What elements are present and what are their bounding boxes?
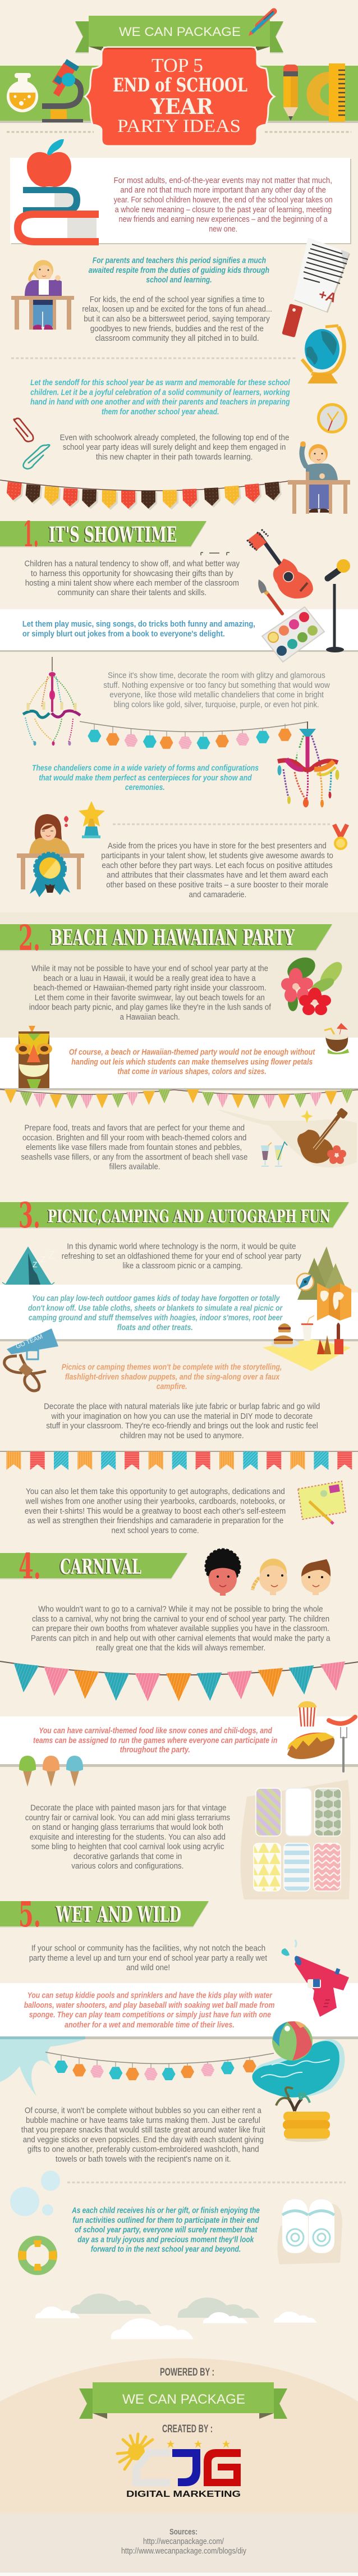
text: following ideas: this new chapter in their path towards learning. [96, 453, 253, 462]
text: campfire callout: Picnics or camping themes won't be complete with the storytelling, [62, 1362, 282, 1372]
water games text [24, 1991, 274, 2030]
created by label: CREATED BY : [162, 2423, 213, 2435]
sendoff text: Let the sendoff for this school year be as warm and memorable for these school [30, 378, 290, 387]
sources text: http://www.wecanpackage.com/blogs/diy [121, 2546, 246, 2556]
bunting: dotted pennants [0, 480, 288, 509]
section 1 heading: 1. [23, 514, 39, 555]
dotted rule [113, 823, 330, 825]
icon: megaphone [7, 1328, 58, 1359]
section 4 text: Who wouldn't want to go to a carnival? While it may not be possible to bring the whole [38, 1605, 323, 1614]
text: autographs: next school years to come. [111, 1526, 199, 1535]
section 5 heading [0, 1894, 209, 1935]
title lines: END of SCHOOL [113, 74, 247, 97]
text: mason jars [25, 1803, 230, 1871]
icon: cocktail glasses [261, 1142, 287, 1166]
text: food and favors: elements like vase fillers made from fountain stones and pebbles, [26, 1143, 242, 1152]
icon: chili dog [287, 1733, 334, 1759]
section 1 heading [0, 514, 206, 555]
games text: You can play low-tech outdoor games kids of today have forgotten or totally [32, 1294, 280, 1303]
section 2 text: While it may not be possible to have your end of school year party at the [31, 963, 268, 974]
text: mason jars: exquisite and interesting for the students. You can also add [30, 1833, 226, 1842]
icon: pink chandelier [23, 657, 80, 746]
sources text [121, 2527, 246, 2556]
leis text: that come in various shapes, colors and sizes. [118, 1067, 267, 1076]
number: 5. [19, 1894, 41, 1935]
water games text: sponge. They can play team competitions or simply just have fun with one [29, 2010, 271, 2020]
icon: microphone [326, 559, 350, 652]
talents text [22, 619, 255, 639]
section 5 text: and wild one! [126, 1963, 170, 1972]
kids text: classroom community they all pitched in to build. [95, 334, 259, 343]
text: food and favors: seashells vase fillers, or any from the assortment of beach shell vase [21, 1152, 247, 1162]
text: chandelier callout: ceremonies. [125, 783, 165, 792]
white band: outdoor games [0, 1285, 358, 1341]
kids text: For kids, the end of the school year signifies a time to [90, 295, 264, 304]
icon: picnic spread [263, 1316, 351, 1371]
food text: throughout the party. [120, 1745, 190, 1755]
sources panel [0, 2514, 358, 2576]
icon: envelope and pencil [298, 1481, 346, 1524]
footer hill [0, 2358, 358, 2514]
icon: girl at desk [11, 260, 74, 330]
food text: You can have carnival-themed food like snow cones and chili-dogs, and [39, 1726, 273, 1735]
games text [28, 1294, 283, 1332]
icon: teal paperclip [23, 445, 49, 469]
section 3 text: refreshing to set an oldfashioned theme for your end of school year party [62, 1252, 301, 1261]
icon: tent [2, 1246, 55, 1285]
number: 2. [19, 917, 40, 958]
section 4 text: Parents can pitch in and help out with other carnival elements that would make the party a [31, 1634, 331, 1643]
brown-haired kid [301, 1559, 331, 1595]
water games text: another for a wet and memorable time of their lives. [65, 2020, 235, 2030]
footer ribbon [79, 2382, 287, 2419]
talents text: Let them play music, sing songs, do tricks both funny and amazing, [22, 619, 255, 629]
text: natural materials: children may not be used to anymore. [120, 1431, 244, 1441]
panel: intro card [10, 158, 351, 244]
sendoff text: them for another school year ahead. [102, 407, 219, 417]
brand name: WE CAN PACKAGE [119, 25, 241, 39]
section 3 heading [0, 1195, 349, 1236]
text: natural materials: stuff in your classroom. They're eco-friendly and brings out the look and rustic feel [46, 1421, 318, 1431]
section 4 text: can prepare their own booths from whatever available supplies you have in the classroom. [32, 1624, 329, 1633]
icon: pen [249, 11, 274, 36]
text: glitzy room: bling colors like gold, silver, turquoise, purple, or even hot pink. [114, 700, 319, 710]
parents and teachers text: For parents and teachers this period signifies a much [93, 256, 266, 265]
text: bubbles: towels or bath towels with the recipient's name on it. [56, 2154, 231, 2164]
games text: don't know off. Use table cloths, sheets or blankets to simulate a real picnic or [28, 1304, 283, 1313]
section 2 text: a Hawaiian beach. [120, 1012, 180, 1022]
icon: popcorn [297, 1701, 317, 1727]
text: campfire callout [62, 1362, 282, 1391]
text: awards: Aside from the prices you have in store for the best presenters and [108, 841, 327, 851]
text: awards: each other before they part ways. Let each focus on positive attitudes [102, 861, 333, 870]
icon: pencil [283, 65, 298, 121]
text: natural materials: with your imagination on how you can use the material in DIY mode to decorate [51, 1412, 313, 1421]
water games text: You can setup kiddie pools and sprinklers and have the kids play with water [27, 1991, 273, 2000]
text: mason jars: various colors and configurations. [71, 1861, 183, 1871]
text: awards: and attributes that their classmates have and let them award each [107, 870, 328, 880]
section 5 text: party theme a level up and turn your end of school year party a really wet [29, 1953, 268, 1963]
icon: paintbrush [258, 579, 282, 614]
text: autographs: even their t-shirts! This would be a greatway to boost each other's self-esteem [25, 1506, 286, 1516]
icon: palm on inflatable rings [276, 2088, 330, 2142]
icon: guitar [247, 529, 313, 599]
dotted rule [67, 2182, 346, 2183]
section 1 text: community can share their talents and skills. [57, 588, 206, 597]
section 3 text: In this dynamic world where technology is the norm, it would be quite [67, 1242, 296, 1251]
icon: tiki mask [15, 1026, 52, 1090]
text: food and favors: fillers available. [109, 1162, 160, 1171]
blonde kid [253, 1559, 287, 1595]
section 1 text: to harness this opportunity for showcasing their gifts than by [31, 569, 233, 578]
sources text: http://wecanpackage.com/ [143, 2537, 224, 2546]
intro paragraph: new one. [209, 225, 237, 234]
text: autographs: You can also let them take this opportunity to get autographs, dedications and [26, 1487, 285, 1496]
text: closing: of school year party, everyone will surely remember that [75, 2225, 258, 2235]
white band: water games [0, 1983, 358, 2039]
text: glitzy room [103, 670, 330, 710]
dotted rule [11, 357, 297, 359]
text: bubbles: Of course, it won't be complete without bubbles so you can either rent a [25, 2105, 261, 2116]
parents and teachers text [89, 256, 269, 285]
section 4 text: really great one that the kids will always remember. [96, 1643, 265, 1653]
icon: folded map [317, 1283, 351, 1321]
icon: rolled towels [277, 2199, 342, 2264]
icon: microscope [42, 63, 83, 122]
text: campfire callout: flashlight-driven shadow puppets, and the sing-along over a faux [65, 1372, 280, 1382]
text: closing: forward to in the next school year and beyond. [91, 2245, 241, 2254]
title card [85, 47, 274, 146]
section 1 text: Children has a natural tendency to show off, and what better way [25, 559, 240, 568]
white band: carnival food [0, 1716, 358, 1767]
bunting: large pennants [0, 1661, 358, 1701]
icon: girl with rosette [17, 814, 84, 897]
text: bubbles: bubble machine or have teams take turns making them. Just be careful [26, 2116, 260, 2125]
icon: ice creams [19, 1756, 83, 1787]
sendoff text [30, 378, 290, 417]
icon: flask [7, 73, 38, 112]
icon: red paperclip [14, 418, 33, 441]
text: autographs: well wishes from one another using their yearbooks, cardboards, notebooks, or [25, 1497, 285, 1506]
intro paragraph: For most adults, end-of-the-year events may not matter that much, [114, 176, 332, 185]
footer brand name: WE CAN PACKAGE [122, 2392, 245, 2407]
icon: tent: Z [48, 1249, 55, 1262]
text: following ideas: school year party ideas will surely delight and keep them engaged in [63, 442, 286, 452]
icon: coconut drink [324, 1023, 349, 1054]
text: mason jars: on stand or hanging glass terrariums that would look both [32, 1823, 223, 1832]
icon: tent: Z [33, 1260, 38, 1269]
text: awards: and camaraderie. [189, 890, 246, 899]
intro paragraph [114, 176, 333, 234]
text: glitzy room: everyone, like those wild metallic chandeliers that come in bright [109, 690, 324, 700]
icon: eraser [282, 304, 303, 337]
heading text: CARNIVAL [60, 1555, 141, 1579]
text: chandelier callout: that would make them perfect as centerpieces for your show and [39, 773, 252, 783]
icon: star trophy [79, 801, 105, 838]
icon: life ring [19, 2240, 57, 2271]
afro kid [205, 1549, 240, 1596]
icon: graded paper [293, 237, 350, 313]
text: closing: day as a truly joyous and precious moment they'll look [77, 2235, 254, 2245]
text: food and favors [21, 1123, 247, 1171]
text: chandelier callout [32, 764, 259, 792]
section 2 text [29, 963, 272, 1022]
section 3 text: like a classroom picnic or a camping. [122, 1261, 242, 1271]
text: following ideas: Even with schoolwork already completed, the following top end of the [60, 433, 289, 442]
kids text: but it can also be a bittersweet period, saying temporary [84, 314, 270, 323]
text: closing: fun activities outlined for them to participate in their end [72, 2216, 259, 2225]
sources text: Sources: [169, 2527, 198, 2537]
splash [0, 2039, 85, 2096]
icon: bubbles [10, 2171, 60, 2216]
bunting: striped banners [0, 1451, 358, 1470]
header dashed rules [7, 131, 351, 133]
section 1 text: hosting a mini talent show where each member of the classroom [25, 578, 239, 588]
text: mason jars: decorative garlands that come in [74, 1852, 182, 1861]
kids text: goodbyes to new friends, buddies and the rest of the [90, 324, 264, 334]
section 2 tinted backdrop [0, 912, 358, 1039]
text: bubbles: gifts to one another, preferably custom-embroidered washcloth, hand [27, 2145, 259, 2154]
text: glitzy room: Since it's show time, decorate the room with glitzy and glamorous [108, 670, 325, 680]
section 2 text: beach or a luau in Hawaii, it would be a really great idea to have a [43, 974, 256, 983]
icon: colourful chandelier [277, 721, 339, 807]
text: bubbles: that you prepare snacks that would still taste great around water like fruit [21, 2125, 265, 2135]
section 2 text: Let them come in their favorite swimwear, lay out beach towels for an [35, 993, 265, 1003]
section 1 text [25, 559, 240, 597]
sendoff text: hand in hand with one another and with their parents and teachers in preparing [30, 398, 290, 407]
text: chandelier callout: These chandeliers come in a wide variety of forms and configurations [32, 764, 259, 773]
title lines: YEAR [150, 94, 213, 119]
icon: rope knot [4, 1354, 46, 1391]
icon: ukulele [297, 1108, 348, 1164]
icon: graded paper: +A [316, 287, 338, 306]
top ribbon [75, 16, 283, 53]
section 4 text [31, 1605, 331, 1653]
icon: kids' faces [205, 1549, 331, 1596]
text: autographs: as well as strengthen their friendships and camaraderie in preparation for the [27, 1516, 283, 1525]
talents text: or simply blurt out jokes from a book to everyone's delight. [22, 629, 225, 639]
text: glitzy room: stuff. Nothing expensive or too fancy but something that would wow [103, 680, 330, 690]
icon: mason jars [241, 1780, 351, 1899]
burlap mat [216, 1109, 357, 1167]
icon: pool [253, 2039, 345, 2098]
number: 3. [19, 1195, 40, 1236]
text: autographs [25, 1487, 286, 1535]
sendoff text: children. Let it be a joyful celebration of a solid community of learners, working [30, 387, 290, 398]
text: food and favors: occasion. Brighten and fill your room with beach-themed colors and [22, 1133, 246, 1143]
games text: camping ground and stuff themselves with hoagies, indoor s'mores, root beer [29, 1313, 283, 1323]
icon: medal [332, 824, 349, 850]
clouds [35, 2294, 316, 2339]
icon: globe [302, 326, 344, 383]
text: bubbles [21, 2105, 265, 2164]
bunting: triangle pennants [0, 1089, 358, 1109]
parents and teachers text: awaited respite from the duties of guiding kids through [89, 266, 269, 275]
icon: apple on books [14, 139, 99, 245]
text: awards [101, 841, 333, 899]
text: food and favors: Prepare food, treats and favors that are perfect for your theme and [25, 1123, 245, 1133]
tiny marks [201, 552, 230, 555]
leis text [69, 1048, 315, 1076]
icon: compass [297, 1273, 314, 1290]
number: 4. [19, 1546, 41, 1587]
garland: paper lanterns [80, 721, 307, 749]
icon: megaphone: GO TEAM [15, 1333, 44, 1350]
section 2 text: beach-themed or Hawaiian-themed party right inside your classroom. [34, 983, 267, 993]
logo wordmark: DIGITAL MARKETING [126, 2490, 241, 2499]
section 4 heading [0, 1546, 187, 1587]
logo: CJG digital marketing [117, 2434, 241, 2499]
section 5 text [29, 1944, 268, 1972]
powered by label: POWERED BY : [160, 2367, 214, 2378]
text: awards: participants in your talent show, let students give awesome awards to [101, 851, 333, 860]
text: closing: As each child receives his or her gift, or finish enjoying the [71, 2205, 260, 2216]
icon: pine trees [297, 1246, 351, 1300]
icon: tent: Z [40, 1255, 45, 1264]
garland: paper lanterns [45, 2052, 274, 2080]
text: closing [71, 2205, 260, 2254]
icon: water gun [282, 1940, 349, 2017]
section 2 text: indoor beach party picnic, and play games like they're in the lush sands of [29, 1003, 272, 1012]
icon: boy at desk [288, 441, 350, 514]
icon: ruler and protractor [306, 63, 345, 122]
text: mason jars: some bling to heighten that cool carnival look using acrylic [31, 1842, 224, 1852]
kids text [82, 295, 272, 343]
kids text: relax, loosen up and be excited for the tons of fun ahead... [82, 304, 272, 314]
text: campfire callout: campfire. [157, 1382, 187, 1391]
icon: sausage on fork [329, 1717, 355, 1771]
text: mason jars: Decorate the place with painted mason jars for that vintage [30, 1803, 226, 1812]
title lines: PARTY IDEAS [117, 116, 241, 136]
heading text: IT'S SHOWTIME [49, 522, 177, 547]
text: natural materials: Decorate the place with natural materials like jute fabric or burlap fabric and go wild [44, 1401, 320, 1412]
icon: hibiscus flowers [281, 953, 346, 1015]
icon: beach ball [272, 2021, 313, 2061]
icon: clock [317, 403, 347, 433]
heading text: WET AND WILD [56, 1902, 181, 1927]
text: bubbles: and veggie sticks or even popsicles. End the day with each student giving [23, 2135, 264, 2145]
water games text: balloons, water shooters, and play baseball with soaking wet ball made from [24, 2000, 274, 2010]
section 3 text [62, 1242, 301, 1271]
text: awards: other based on these positive traits – a sure booster to their morale [106, 880, 328, 889]
intro paragraph: and are not that much more important than any other day of the [120, 185, 326, 195]
section 2 heading [0, 917, 332, 958]
white band: leis [0, 1038, 358, 1090]
games text: floats and other treats. [117, 1323, 193, 1332]
section 5 text: If your school or community has the facilities, why not notch the beach [31, 1944, 265, 1953]
white band: talents [0, 609, 358, 652]
text: natural materials [44, 1401, 320, 1441]
title lines: TOP 5 [152, 54, 203, 76]
text: following ideas [60, 433, 289, 462]
green header band [0, 66, 358, 123]
icon: paint palette [262, 607, 324, 662]
food text [33, 1726, 277, 1755]
text: mason jars: country fair or carnival look. You can add mini glass terrariums [25, 1813, 230, 1823]
title lines [113, 54, 247, 136]
parents and teachers text: school and learning. [146, 275, 212, 285]
food text: teams can be assigned to run the games where everyone can participate in [33, 1736, 277, 1745]
